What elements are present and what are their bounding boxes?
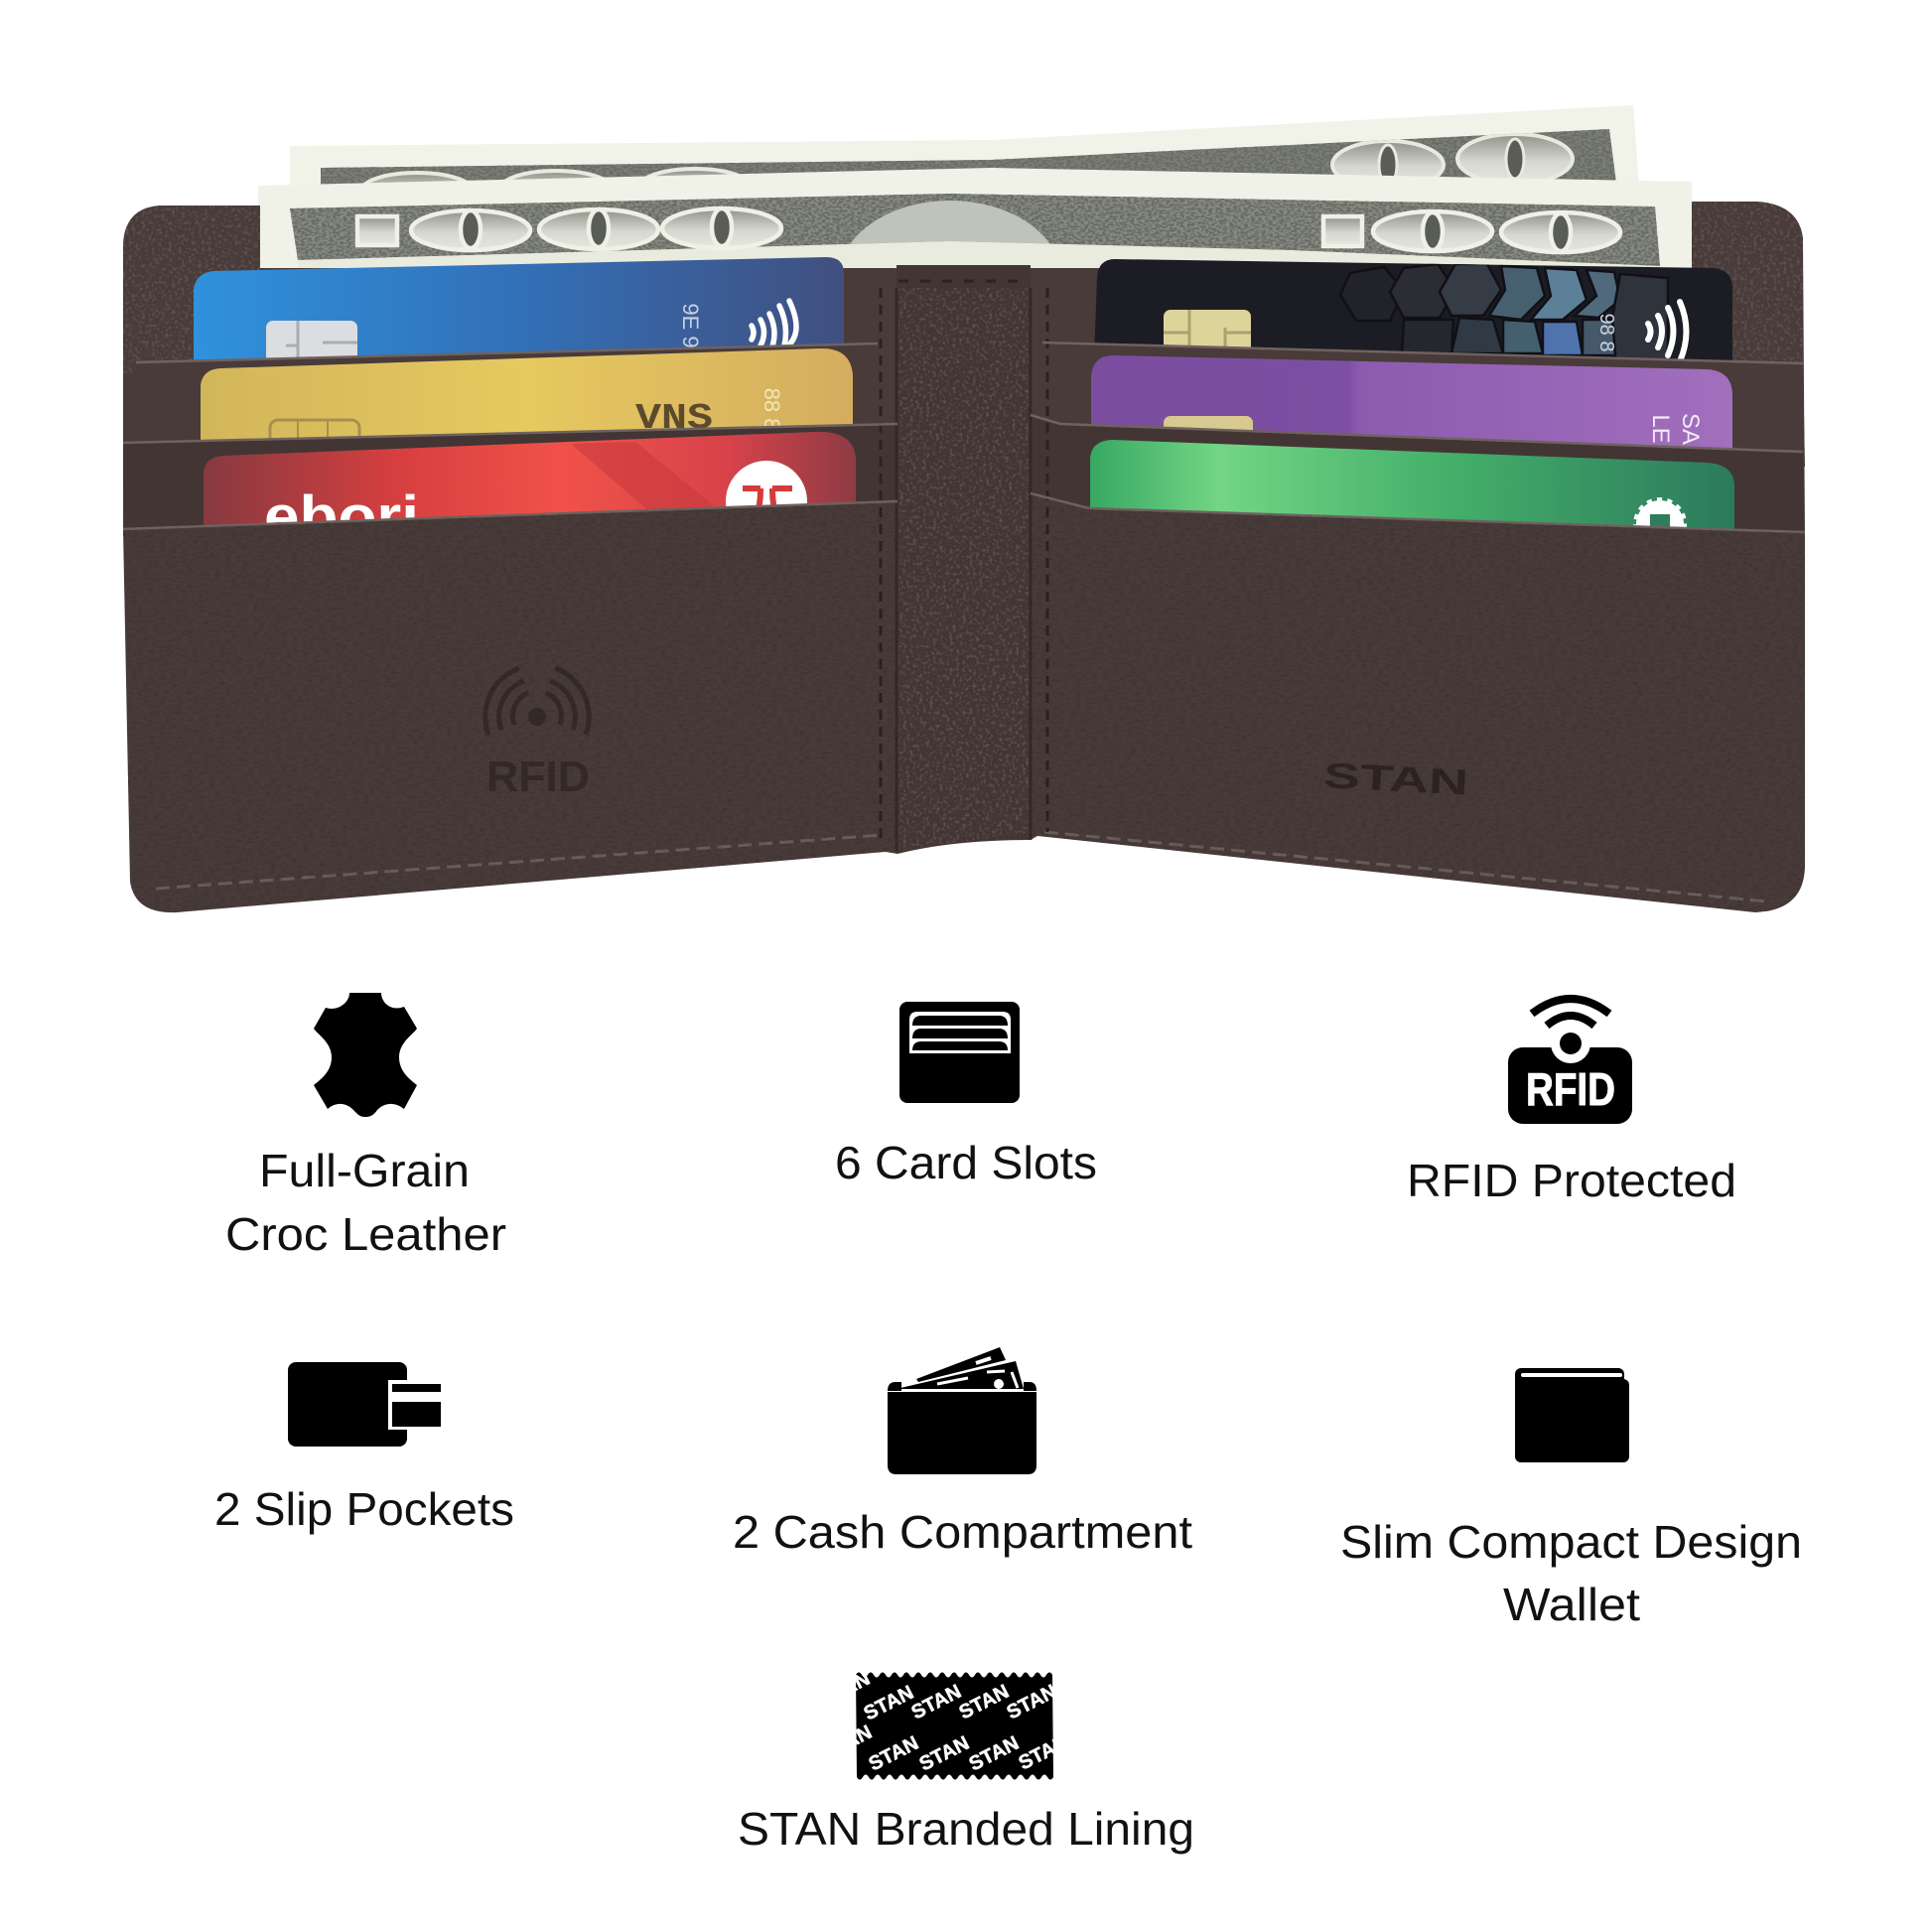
pocket one right: [1031, 343, 1805, 467]
icon: STAN lining swatch: STAN: [819, 1722, 876, 1764]
label: Croc Leather: [225, 1208, 506, 1260]
feature: slip pockets: [214, 1362, 514, 1535]
numerals 100 left: [357, 208, 781, 250]
spine: [897, 265, 1031, 854]
card digits: 98 8: [1595, 314, 1617, 351]
card lettering: LE: [1647, 414, 1674, 444]
card logo: [726, 461, 807, 542]
card chip: [270, 420, 359, 460]
icon: RFID: RFID: [1526, 1063, 1615, 1115]
label: Slim Compact Design: [1340, 1516, 1802, 1568]
card digits: 88 8: [759, 388, 784, 430]
icon: STAN lining swatch: [817, 1668, 1072, 1779]
embossed STAN logo: STAN: [1322, 755, 1469, 803]
back banknote: [290, 105, 1638, 185]
spine groove shadows: [897, 288, 1031, 852]
icon: RFID: [1508, 999, 1632, 1124]
label: RFID Protected: [1407, 1155, 1736, 1206]
right stitching: [1044, 832, 1767, 901]
feature: cash compartment: [733, 1347, 1192, 1558]
pocket one left: [123, 344, 897, 459]
icon: STAN lining swatch: STAN: [916, 1732, 973, 1775]
blue card: [194, 257, 844, 377]
leather grain overlay right: [1031, 493, 1805, 912]
wallet photo: [123, 105, 1805, 912]
right upper panel texture: [1692, 202, 1803, 370]
icon: slim wallet: [1515, 1368, 1629, 1462]
gold card: [201, 348, 853, 460]
icon: leather hide: [314, 993, 417, 1117]
feature: full-grain leather: [225, 993, 506, 1260]
label: 2 Slip Pockets: [214, 1483, 514, 1535]
spine stitching: [881, 288, 1047, 840]
card brand name: ebori: [264, 484, 419, 549]
icon: STAN lining swatch: STAN: [956, 1681, 1013, 1724]
icon: wallet with banknotes: [888, 1347, 1036, 1474]
leather grain overlay left: [123, 501, 897, 912]
left upper panel texture: [123, 206, 260, 374]
feature: card slots: [835, 1002, 1097, 1188]
contactless icon: [752, 301, 796, 359]
red card: [204, 432, 856, 556]
icon: wallet with card: [288, 1362, 442, 1447]
label: 2 Cash Compartment: [733, 1506, 1192, 1558]
front banknote: [258, 168, 1692, 268]
card chip: [1164, 310, 1251, 355]
card highlight streak: [571, 442, 715, 516]
green card: [1090, 440, 1734, 556]
card chip: [1164, 416, 1253, 446]
numerals 100 right: [1323, 211, 1620, 252]
front pocket left: [123, 501, 897, 912]
label: Full-Grain: [259, 1145, 470, 1196]
wallet back panel: [123, 202, 1805, 536]
pocket two left: [123, 424, 897, 541]
embossed RFID logo: [485, 668, 590, 801]
front pocket right: [1031, 493, 1805, 912]
icon: STAN lining swatch: STAN: [1016, 1731, 1072, 1774]
icon: STAN lining swatch: STAN: [861, 1682, 917, 1725]
icon: STAN lining swatch: STAN: [1004, 1681, 1060, 1724]
pocket two right: [1031, 415, 1805, 556]
icon: STAN lining swatch: STAN: [966, 1732, 1023, 1775]
card mosaic pattern: [1340, 264, 1668, 367]
card lettering: VNS: [635, 398, 713, 439]
label: Wallet: [1503, 1579, 1640, 1630]
feature: branded lining: [738, 1668, 1194, 1855]
icon: card holder: [899, 1002, 1020, 1103]
label: 6 Card Slots: [835, 1137, 1097, 1188]
label: STAN Branded Lining: [738, 1803, 1194, 1855]
card digits: 9E 9: [678, 303, 703, 348]
spine top band stitching: [898, 280, 1029, 282]
feature: slim compact design: [1340, 1368, 1802, 1630]
card lettering: SA: [1677, 413, 1704, 445]
card chip: [266, 321, 357, 370]
purple card: [1091, 355, 1732, 467]
contactless icon: [1648, 302, 1686, 361]
pocket edge highlights: [123, 343, 1805, 532]
spine grain: [898, 288, 1029, 852]
icon: STAN lining swatch: STAN: [866, 1732, 922, 1775]
feature: RFID: [1407, 999, 1736, 1206]
embossed RFID text: RFID: [486, 753, 590, 801]
black card: [1094, 259, 1732, 360]
icon: STAN lining swatch: STAN: [817, 1668, 874, 1711]
card logo: [1636, 500, 1684, 548]
icon: STAN lining swatch: STAN: [908, 1681, 965, 1724]
left stitching: [156, 835, 883, 889]
